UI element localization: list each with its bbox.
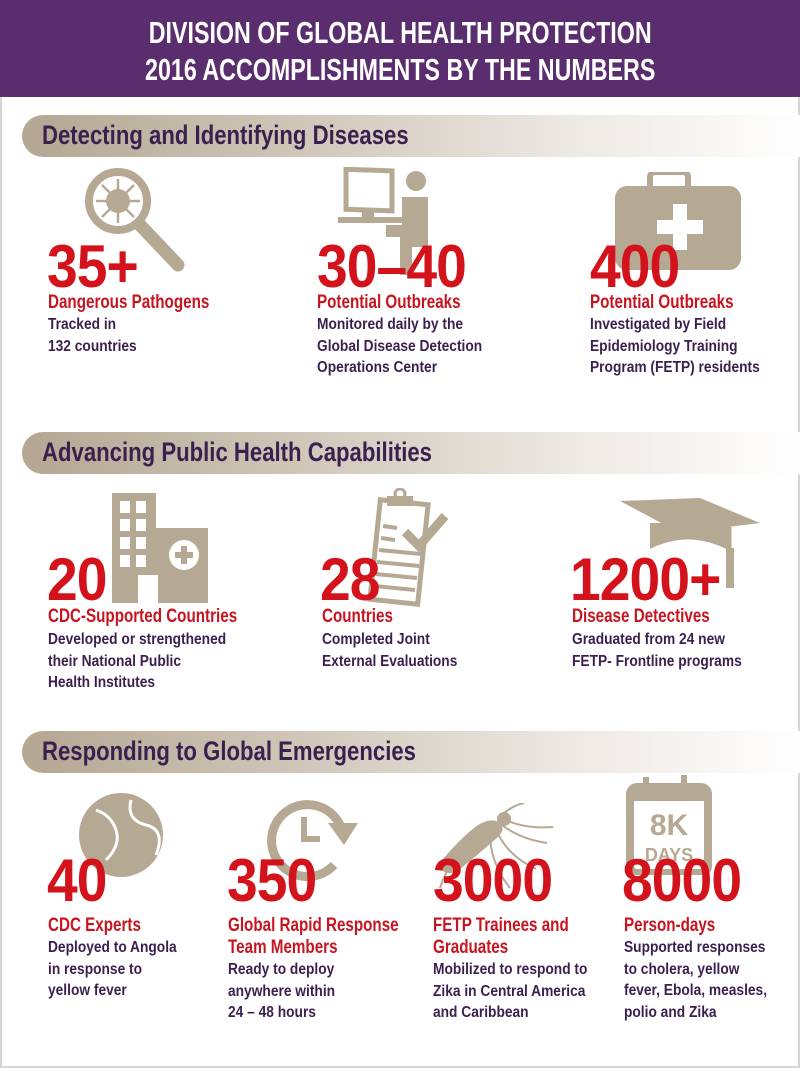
description: Epidemiology Training [590,338,738,354]
label [228,915,399,958]
item: 400 [590,172,760,376]
description: Graduated from 24 new [572,631,725,648]
description [48,939,177,999]
description: anywhere within [228,982,335,1000]
icon: graduation cap [620,498,760,588]
description: Ready to deploy [228,961,334,978]
title: 2016 ACCOMPLISHMENTS BY THE NUMBERS [145,52,655,87]
item: 8000 [622,775,767,1020]
icon: clipboard with check [367,488,448,607]
number: 400 [590,233,679,300]
description: Program (FETP) residents [590,359,760,376]
label: Disease Detectives [572,606,710,627]
description [322,631,457,670]
item: 35+ [47,168,209,354]
icon: first aid kit [615,172,741,270]
number: 35+ [47,233,138,300]
item: 40 [47,793,177,999]
description: Supported responses [624,939,765,956]
section band: responding: Responding to Global Emergencies [42,736,416,766]
label: FETP Trainees and [433,915,569,936]
description: Developed or strengthened [48,631,226,648]
section band: advancing [22,432,800,474]
icon: clock with arrow [267,800,358,882]
description: their National Public [48,652,181,670]
description: Monitored daily by the [317,316,463,333]
description: fever, Ebola, measles, [624,982,767,999]
label: Potential Outbreaks [590,292,734,313]
description [317,316,482,376]
label: CDC-Supported Countries [48,606,237,627]
item: 28 [320,488,457,670]
icon: person at computer [338,167,428,275]
label: Global Rapid Response [228,915,399,936]
description [228,961,335,1021]
label: Dangerous Pathogens [48,292,209,313]
icon: mosquito [439,803,554,888]
number: 20 [47,546,107,613]
description: Mobilized to respond to [433,961,587,978]
number: 3000 [433,847,552,914]
number: 1200+ [570,546,720,613]
label [433,915,569,958]
title: DIVISION OF GLOBAL HEALTH PROTECTION [149,15,651,50]
description [48,316,137,354]
item: 3000 [433,803,587,1021]
label: Person-days [624,915,715,936]
section band: detecting [22,115,800,157]
label: Team Members [228,937,338,958]
icon: hospital building [112,493,208,603]
description: FETP- Frontline programs [572,652,742,670]
title [0,0,800,97]
description: Completed Joint [322,631,430,648]
description: Deployed to Angola [48,939,177,956]
description: to cholera, yellow [624,960,739,978]
item: 20 [47,493,237,691]
icon: calendar 8K days: DAYS [645,845,693,865]
item: 350 [227,800,399,1021]
description [624,939,767,1020]
description [433,961,587,1021]
number: 350 [227,847,316,914]
label: Graduates [433,937,508,958]
description: 24 – 48 hours [228,1004,316,1021]
description [590,316,760,376]
label: Potential Outbreaks [317,292,461,313]
description [48,631,226,691]
description: Global Disease Detection [317,338,482,354]
description [572,631,742,670]
icon: calendar 8K days [626,775,712,875]
section band: advancing: Advancing Public Health Capabilities [42,437,432,467]
label: Countries [322,606,393,627]
description: Health Institutes [48,674,155,691]
description: polio and Zika [624,1004,717,1020]
description: yellow fever [48,982,127,999]
number: 30–40 [317,233,466,300]
section band: responding [22,731,800,773]
description: Investigated by Field [590,316,726,333]
description: Zika in Central America [433,982,585,1000]
description: in response to [48,960,142,978]
item: 1200+ [570,498,760,670]
number: 8000 [622,847,741,914]
description: 132 countries [48,338,137,354]
description: Tracked in [48,316,116,333]
icon: globe [79,793,163,877]
icon: calendar 8K days: 8K [650,809,689,842]
description: and Caribbean [433,1004,529,1021]
section band: detecting: Detecting and Identifying Diseases [42,120,409,150]
number: 28 [320,546,380,613]
number: 40 [47,847,107,914]
item: 30-40 [317,167,482,376]
description: Operations Center [317,359,437,376]
label: CDC Experts [48,915,141,936]
icon: magnifier with virus [85,168,184,272]
description: External Evaluations [322,652,457,670]
